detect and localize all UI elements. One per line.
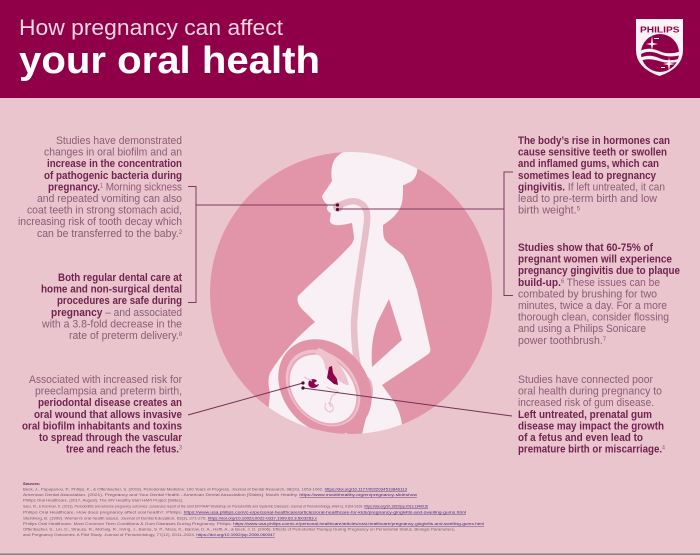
sources list: Steinberg, B. (1999). Women’s oral health issues. Journal of Dental Education, 63(3), 271-275. https://doi.org/10.1002/j.0022-0337.1999.63.3.tb03263.x — [23, 515, 317, 520]
text block: hormones and gingivitis: lead to pre-term birth and low — [518, 193, 657, 205]
text block: prenatal gum disease — [518, 374, 666, 456]
connector: right bracket — [336, 172, 513, 296]
text block: oral biofilm changes: 1 — [100, 183, 104, 189]
text block: hormones and gingivitis: The body’s rise in hormones can — [518, 135, 670, 147]
text block: periodontal disease — [22, 374, 183, 456]
text block: prenatal gum disease: disease may impact the growth — [518, 420, 664, 432]
sources list: American Dental Association. (2021). Pregnancy and Your Dental Health - American Dental Association [Slides]. Mouth Healthy. https://www.mouthhealthy.org/en/pregnancy-slideshow — [23, 492, 417, 497]
sources list: Beck, J., Papapanou, P., Philips, K., & Offenbacher, S. (2019). Periodontal Medicine: 100 Years of Progress. Journal of Dental Research, 98(10), 1053-1062. https://doi.org/10.1177/0022034519846113 — [23, 486, 408, 492]
text block: prenatal gum disease: of a fetus and even lead to — [518, 432, 643, 444]
text block: oral biofilm changes: changes in oral biofilm and an — [44, 147, 182, 159]
text block: oral biofilm changes — [18, 135, 183, 240]
header band — [0, 0, 700, 98]
text block: prenatal gum disease: premature birth or miscarriage. — [518, 444, 681, 456]
text block: 60-75 percent statistic: 7 — [603, 337, 607, 343]
icon: Philips logo shield: PHILIPS — [640, 24, 680, 34]
text block: oral biofilm changes: increasing risk of tooth decay which — [18, 216, 182, 228]
text block: prenatal gum disease: Studies have connected poor — [518, 374, 653, 386]
text block: dental care is safe: procedures are safe during — [57, 295, 182, 307]
text block: periodontal disease: Associated with increased risk for — [29, 374, 182, 386]
text block: prenatal gum disease: increased risk of gum disease. — [518, 397, 654, 409]
fetus outline — [304, 377, 338, 412]
sources list: Sources: — [23, 481, 40, 486]
text block: dental care is safe: with a 3.8-fold decrease in the — [41, 318, 182, 330]
text block: oral biofilm changes: can be transferred to the baby. — [37, 228, 186, 240]
throat and esophagus — [338, 201, 367, 378]
title: How pregnancy can affect — [19, 15, 283, 40]
text block: dental care is safe: 8 — [179, 332, 183, 338]
sources list: Philips Oral Healthcare. (2017, August). The WV Healthy Start HAPI Project [Slides]. — [23, 498, 183, 503]
text block: 60-75 percent statistic: and using a Philips Sonicare — [518, 323, 646, 335]
text block: hormones and gingivitis: 5 — [577, 207, 581, 213]
text block: 60-75 percent statistic: combated by brushing for two — [518, 288, 657, 300]
icon: Philips logo shield — [636, 19, 684, 76]
text block: 60-75 percent statistic: thorough clean, consider flossing — [518, 312, 669, 324]
sources list — [23, 481, 484, 537]
text block: hormones and gingivitis — [518, 135, 670, 217]
text block: oral biofilm changes: and repeated vomiting can also — [37, 193, 182, 205]
text block: 60-75 percent statistic: 6 — [561, 279, 565, 285]
text block: hormones and gingivitis: and inflamed gums, which can — [518, 158, 659, 170]
text block: periodontal disease: oral biofilm inhabitants and toxins — [22, 420, 182, 432]
arm gap — [372, 299, 402, 367]
uterus — [278, 339, 373, 434]
pink circle backdrop — [210, 152, 492, 434]
text block: oral biofilm changes: 2 — [179, 230, 183, 236]
text block: 60-75 percent statistic — [518, 242, 680, 347]
text block: oral biofilm changes: coat teeth in strong stomach acid, — [27, 205, 182, 217]
text block: dental care is safe: home and non-surgical dental — [41, 284, 182, 296]
text block: oral biofilm changes: of pathogenic bacteria during — [44, 170, 182, 182]
text block: 60-75 percent statistic: build-up. — [518, 277, 564, 289]
title — [19, 15, 320, 82]
pregnant woman silhouette — [268, 152, 430, 434]
text block: 60-75 percent statistic: pregnancy gingivitis due to plaque — [518, 265, 680, 277]
text block: 60-75 percent statistic: pregnant women will experience — [518, 254, 672, 266]
text block: periodontal disease: 3 — [179, 446, 183, 452]
text block: oral biofilm changes: increase in the concentration — [47, 158, 182, 170]
sources list: Sanz, M., & Kornman, K. (2013). Periodontitis and adverse pregnancy outcomes: consensus report of the Joint EFP/AAP Workshop on Periodontitis and Systemic Diseases. Journal of Periodontology, 84(4-s), S164-S169. https://doi.org/10.1902/jop.2013.1340016 — [23, 504, 429, 508]
text block: oral biofilm changes: pregnancy. — [48, 181, 106, 193]
sources list: and Pregnancy Outcomes: A Pilot Study. Journal of Periodontology, 77(12), 2011–2024. https://doi.org/10.1902/jop.2006.060047 — [23, 532, 276, 537]
text block: prenatal gum disease: Left untreated, prenatal gum — [518, 409, 652, 421]
connector: lower right line — [301, 386, 512, 416]
text block: 60-75 percent statistic: These issues can be — [564, 277, 660, 289]
text block: dental care is safe: rate of preterm delivery. — [69, 330, 184, 342]
text block: 60-75 percent statistic: minutes, twice a day. For a more — [518, 300, 667, 312]
text block: dental care is safe — [41, 272, 183, 342]
text block: hormones and gingivitis: birth weight. — [518, 205, 577, 217]
text block: prenatal gum disease: oral health during pregnancy to — [518, 386, 662, 398]
text block: oral biofilm changes: Morning sickness — [103, 181, 182, 193]
text block: periodontal disease: preeclampsia and preterm birth, — [35, 386, 182, 398]
sources list: Philips Oral Healthcare. How does pregnancy affect oral health?. Philips. https://www.usa.philips.com/c-e/personal-healthcare/articles/oral-healthcare-for-kids/pregnancy-gingivitis-and-swelling-gums.html — [23, 510, 466, 514]
text block: periodontal disease: tree and reach the fetus. — [66, 444, 193, 456]
text block: periodontal disease: periodontal disease creates an — [38, 397, 182, 409]
text block: periodontal disease: oral wound that allows invasive — [34, 409, 182, 421]
title: your oral health — [19, 40, 320, 82]
text block: 60-75 percent statistic: power toothbrush. — [518, 335, 606, 347]
text block: hormones and gingivitis: gingivitis. If left untreated, it can — [518, 181, 665, 193]
connector: lower left line — [188, 381, 305, 415]
sources list: Offenbacher, S., Lin, D., Strauss, R., McKaig, R., Irving, J., Barros, S. P., Moss, K., Barrow, D. A., Hefti, A., & Beck, J. D. (2006). Effects of Periodontal Therapy During Pregnancy on Periodontal Status, Biologic Parameters, — [23, 527, 455, 532]
text block: dental care is safe: pregnancy – and associated — [51, 307, 182, 319]
text block: 60-75 percent statistic: Studies show that 60-75% of — [518, 242, 653, 254]
text block: prenatal gum disease: 4 — [662, 446, 666, 452]
text block: hormones and gingivitis: cause sensitive teeth or swollen — [518, 147, 667, 159]
text block: hormones and gingivitis: sometimes lead to pregnancy — [518, 170, 657, 182]
text block: dental care is safe: Both regular dental care at — [58, 272, 182, 284]
connector: left bracket — [188, 186, 339, 302]
text block: periodontal disease: to spread through the vascular — [39, 432, 183, 444]
text block: oral biofilm changes: Studies have demonstrated — [56, 135, 182, 147]
sources list: Philips Oral Healthcare. Most Common Teen Conditions & Gum Diseases During Pregnancy. Philips. https://www.usa.philips.com/c-e/personal-healthcare/articles/oral-healthcare/pregnancy-gingivitis-and-swelling-gums.html — [23, 521, 484, 526]
